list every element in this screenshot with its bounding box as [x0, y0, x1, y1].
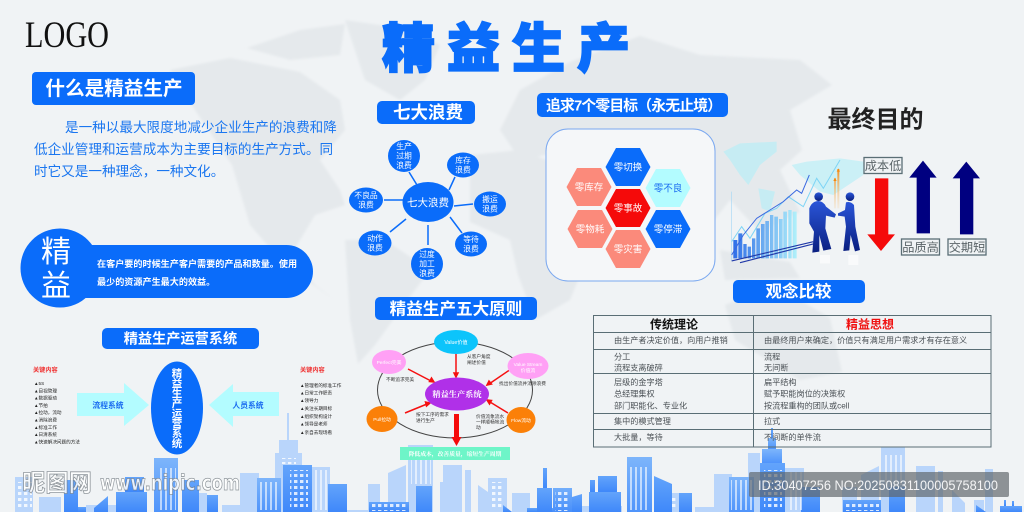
node: perfect — [372, 350, 406, 374]
hex: defects — [646, 169, 690, 207]
hex: accidents — [606, 189, 650, 227]
panel: concept comparison — [594, 280, 991, 447]
node: over-processing — [411, 248, 443, 280]
principle notes: 进行生产 — [416, 417, 435, 424]
principle notes: 找出价值流并消除浪费 — [499, 380, 546, 387]
column: traditional theory: 分工 — [614, 352, 630, 362]
list: process key content: ▲快速解决问题的方法 — [34, 438, 80, 445]
table grid — [594, 316, 991, 447]
list: people key content: ▲领导力 — [300, 397, 319, 404]
heading: what is lean production — [32, 72, 195, 105]
node: transport: 浪费 — [482, 204, 498, 214]
hex: disasters: 零灾害 — [614, 244, 642, 256]
illustration: business growth — [723, 142, 980, 265]
text block: definition: 低企业管理和运营成本为主要目标的生产方式。同 — [34, 141, 333, 157]
list: process key content: ▲日清系统 — [34, 431, 57, 438]
rounded card — [546, 129, 715, 281]
node: transport: 搬运 — [482, 194, 498, 204]
node: inventory — [447, 152, 479, 178]
column: lean thinking: 按流程重构的团队或cell — [764, 400, 850, 410]
list: process key content: ▲消除浪费 — [34, 416, 57, 424]
watermark: id — [749, 472, 1009, 497]
central ellipse: 生 — [172, 387, 183, 400]
node: value — [434, 330, 478, 354]
text block: definition: 是一种以最大限度地减少企业生产的浪费和降 — [65, 119, 337, 135]
result box — [400, 447, 510, 460]
heading: five principles — [375, 297, 537, 320]
arrow: process system: 流程系统 — [92, 400, 124, 410]
central ellipse: 统 — [172, 437, 183, 450]
hex: inventory: 零库存 — [575, 182, 604, 194]
heading: five principles: 精益生产五大原则 — [390, 300, 522, 318]
central ellipse: 益 — [172, 377, 183, 390]
watermark: site — [22, 470, 240, 497]
node: over-processing: 过度 — [419, 249, 435, 259]
label: low cost: 成本低 — [865, 159, 901, 173]
logo: LOGO — [25, 15, 109, 56]
list: process key content: ▲5S — [34, 381, 44, 386]
list: process key content: ▲节拍 — [34, 402, 48, 409]
heading: seven wastes: 七大浪费 — [393, 102, 463, 122]
principle notes: 按下工序的需求 — [416, 411, 449, 418]
column: traditional theory: 部门职能化、专业化 — [614, 400, 687, 410]
node: center system — [425, 378, 489, 410]
heading: concept comparison — [733, 280, 865, 303]
node: motion: 动作 — [367, 233, 383, 243]
label: short delivery: 交期短 — [949, 240, 985, 254]
principle notes: 一样顺畅地流 — [476, 418, 504, 426]
spokes — [384, 172, 473, 245]
node: value stream — [508, 353, 548, 379]
list: process key content — [33, 366, 80, 445]
column: lean thinking: 由最终用户来确定，价值只有满足用户需求才有存在意义 — [764, 335, 967, 345]
column: traditional theory: 大批量，等待 — [614, 432, 663, 442]
node: value stream: 价值流 — [521, 367, 535, 374]
node: inventory: 浪费 — [455, 164, 471, 174]
column: lean thinking: 无间断 — [764, 362, 788, 372]
heading: zero goals — [537, 93, 728, 117]
panel: seven wastes — [349, 101, 506, 280]
central ellipse: 精 — [172, 367, 183, 380]
node: inventory: 库存 — [455, 155, 471, 165]
node: center system: 精益生产系统 — [432, 389, 482, 399]
callout characters: 益 — [41, 270, 71, 303]
column: lean thinking: 扁平结构 — [764, 377, 797, 387]
principle notes: 价值流象流水 — [476, 413, 504, 420]
panel: what is lean production — [32, 72, 337, 179]
node: transport — [474, 192, 506, 216]
hub — [402, 182, 454, 222]
heading: zero goals: 追求7个零目标（永无止境） — [546, 96, 722, 114]
principle notes — [386, 353, 546, 431]
central ellipse — [151, 362, 203, 454]
arrow: process system — [77, 383, 149, 426]
list: process key content: ▲目视管理 — [34, 387, 57, 394]
panel: lean operating system — [33, 328, 342, 454]
list: people key content: ▲日常工作职责 — [300, 390, 333, 397]
central ellipse: 运 — [172, 408, 183, 420]
list: people key content: ▲组织架构设计 — [300, 413, 333, 420]
principle notes: 从客户角度 — [467, 353, 491, 360]
node: expired: 生产 — [396, 141, 412, 151]
node: defects: 不良品 — [354, 190, 378, 200]
column: traditional theory: 集中的模式管理 — [614, 416, 671, 426]
node: motion — [358, 230, 392, 256]
watermark: id: ID:30407256 NO:20250831100005758100 — [758, 477, 998, 493]
central ellipse: 营 — [172, 417, 182, 430]
central ellipse: 产 — [172, 397, 182, 410]
heading: seven wastes — [377, 101, 475, 124]
node: flow — [506, 407, 536, 433]
hex: stagnation — [646, 210, 690, 248]
node: flow: Flow流动 — [511, 417, 531, 424]
column: lean thinking: 流程 — [764, 352, 780, 362]
list: people key content: ▲关注长期目标 — [300, 405, 333, 412]
node: over-processing: 加工 — [419, 258, 435, 268]
central ellipse: 系 — [172, 427, 182, 440]
principle notes: 不断追求完美 — [386, 376, 414, 383]
red connectors — [405, 354, 511, 413]
panel: ultimate goal — [723, 106, 986, 265]
hex: consumption — [568, 210, 612, 248]
heading: concept comparison: 观念比较 — [766, 281, 832, 301]
node: expired — [388, 140, 420, 172]
column: traditional theory: 总经理集权 — [614, 388, 655, 398]
hub: 七大浪费 — [407, 196, 449, 209]
main title: 精益生产 — [382, 20, 630, 79]
column: lean thinking: 赋予职能岗位的决策权 — [764, 388, 845, 398]
panel: seven zero goals — [537, 93, 728, 281]
node: pull — [366, 406, 398, 432]
arrow: people system — [209, 384, 279, 427]
list: process key content: 关键内容 — [33, 366, 58, 374]
table header: 精益思想 — [846, 316, 894, 332]
watermark: site: 昵图网 — [22, 470, 92, 497]
city skyline — [15, 413, 1022, 512]
callout pill — [60, 245, 313, 298]
list: people key content: ▲领导是老师 — [300, 421, 328, 428]
principle notes: 动 — [476, 424, 481, 431]
callout text: 最少的资源产生最大的效益。 — [97, 276, 215, 287]
list: process key content: ▲拉动，流动 — [34, 409, 62, 416]
heading: operating system: 精益生产运营系统 — [124, 330, 237, 348]
list: people key content: 关键内容 — [300, 366, 325, 374]
table header: 传统理论 — [650, 316, 698, 332]
hex: stagnation: 零停滞 — [654, 224, 683, 236]
node: expired: 过期 — [396, 150, 412, 160]
node: expired: 浪费 — [396, 160, 412, 170]
hex: defects: 零不良 — [654, 182, 683, 194]
node: motion: 浪费 — [367, 242, 383, 252]
list: people key content: ▲亲自去现场看 — [300, 429, 333, 436]
outer ring — [378, 342, 532, 438]
table header — [650, 316, 894, 332]
node: over-processing: 浪费 — [419, 268, 435, 278]
heading: ultimate goal: 最终目的 — [828, 106, 924, 134]
callout text: 在客户要的时候生产客户需要的产品和数量。使用 — [97, 258, 297, 269]
hex: changeover: 零切换 — [614, 162, 643, 174]
node: value: Value价值 — [444, 338, 468, 346]
arrow: people system: 人员系统 — [232, 400, 264, 410]
hex: inventory — [566, 168, 612, 206]
column: traditional theory: 由生产者决定价值，向用户推销 — [614, 335, 728, 345]
node: defects — [349, 188, 383, 212]
text block: definition: 时它又是一种理念，一种文化。 — [34, 163, 224, 179]
callout circle — [20, 228, 100, 308]
column: traditional theory: 层级的金字塔 — [614, 377, 663, 387]
result box: 降低成本，改善质量，缩短生产周期 — [409, 450, 502, 459]
heading: what is lean production: 什么是精益生产 — [45, 78, 183, 100]
label: high quality: 品质高 — [902, 240, 939, 254]
node: defects: 浪费 — [358, 200, 374, 210]
principle notes: 阐述价值 — [467, 359, 486, 366]
arrow: result — [452, 414, 462, 446]
panel: lean callout — [20, 228, 313, 308]
node: perfect: Perfect完美 — [377, 359, 402, 366]
list: people key content: ▲管理者的标准工作 — [300, 382, 342, 389]
list: process key content: ▲标准工作 — [34, 424, 57, 431]
node: waiting — [455, 232, 487, 256]
column: lean thinking: 拉式 — [764, 416, 780, 426]
callout characters: 精 — [41, 236, 71, 269]
hex: disasters — [606, 230, 650, 268]
world map background — [170, 20, 842, 380]
panel: five lean principles — [366, 297, 548, 460]
hex: consumption: 零物耗 — [576, 224, 605, 236]
node: value stream: Value Stream — [514, 362, 542, 368]
column: traditional theory: 流程支离破碎 — [614, 362, 663, 372]
hex: accidents: 零事故 — [614, 202, 643, 214]
hex: changeover — [606, 148, 650, 186]
list: process key content: ▲数据驱动 — [34, 395, 57, 402]
watermark: site: www.nipic.com — [100, 471, 240, 495]
list: people key content — [300, 366, 342, 436]
heading: operating system — [102, 328, 259, 349]
column: lean thinking: 不间断的单件流 — [764, 432, 821, 442]
node: waiting: 浪费 — [463, 244, 479, 254]
node: pull: Pull拉动 — [373, 416, 391, 423]
node: waiting: 等待 — [463, 234, 479, 244]
